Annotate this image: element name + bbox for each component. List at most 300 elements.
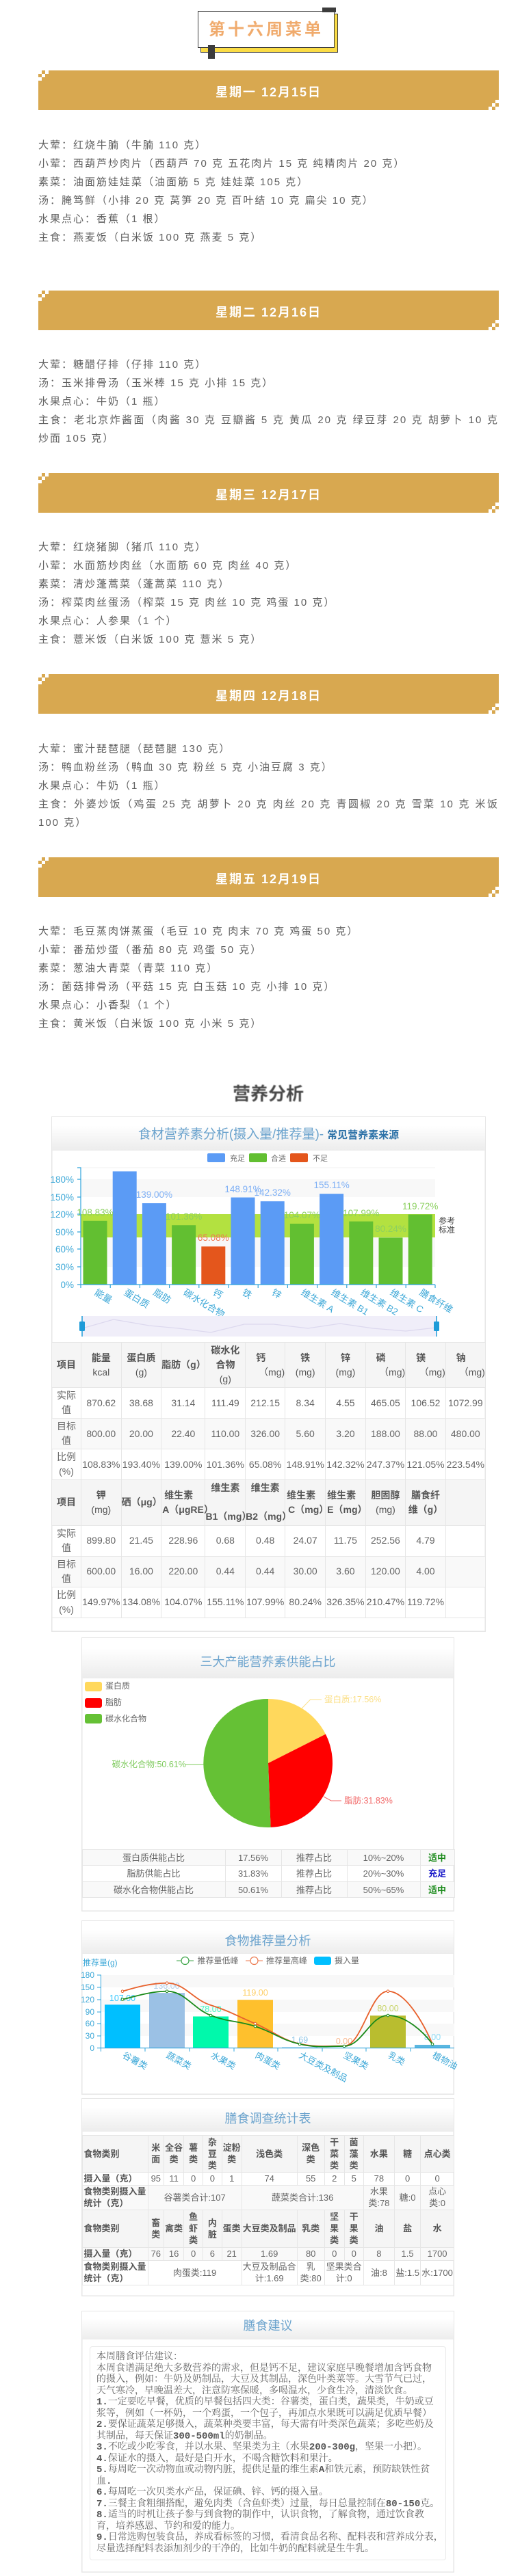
nutrient data table: 目标 (57, 1421, 76, 1432)
dietary survey table: 0 (332, 2249, 337, 2259)
x axis labels: 锌 (270, 1287, 283, 1301)
chart legend: 充足 (230, 1153, 245, 1163)
recommended high line (121, 1982, 432, 2046)
x axis labels (121, 2050, 459, 2084)
menu: Wednesday: 水果点心：人参果（1 个） (38, 615, 178, 627)
energy share table: 50.61% (238, 1884, 268, 1895)
nutrient data table: 31.14 (171, 1397, 195, 1408)
x axis labels: 维生素 C (388, 1287, 426, 1315)
panel: dietary survey table (81, 2098, 454, 2296)
bar value labels: 108.83% (77, 1207, 114, 1218)
panel: macronutrient energy share (81, 1637, 454, 1911)
dietary survey table: 摄入量（克） (83, 2249, 138, 2259)
nutrient data table: 值 (62, 1404, 71, 1415)
dietary survey table: 类:80 (300, 2273, 322, 2283)
advice text: 9.日常选购包装食品，养成看标签的习惯，看清食品名称、配料表和营养成分表， (96, 2532, 443, 2543)
dietary survey table: 果 (350, 2223, 359, 2233)
y axis labels: 180% (50, 1175, 74, 1185)
panel heading: nutrient analysis (52, 1117, 485, 1151)
dietary survey table: 点心 (428, 2186, 446, 2197)
energy share table: 50%~65% (363, 1884, 404, 1895)
dietary survey table: 点心类 (424, 2149, 451, 2159)
dietary survey table: 摄入量（克） (83, 2173, 138, 2184)
menu: Thursday: 100 克） (38, 817, 87, 829)
combo chart: food intake and recommended range (81, 1955, 459, 2084)
dietary survey table: 脏 (208, 2229, 217, 2240)
advice text: 7.三餐主食粗细搭配，避免肉类（含鱼虾类）过量，每日总量控制在80-150克。 (96, 2498, 439, 2509)
dietary survey table: 内 (208, 2218, 217, 2228)
nutrient data table: 800.00 (86, 1427, 116, 1438)
nutrient data table: 维生素 (287, 1490, 315, 1501)
nutrient data table: 870.62 (86, 1397, 116, 1408)
nutrient data table: （mg) (419, 1366, 445, 1377)
bar value labels: 148.91% (224, 1184, 261, 1194)
menu: Friday: 小荤：番茄炒蛋（番茄 80 克 鸡蛋 50 克） (38, 944, 262, 956)
nutrient data table: (%) (59, 1604, 74, 1615)
menu: Thursday (38, 743, 499, 829)
nutrient data table: 比例 (57, 1451, 76, 1462)
chart legend: 不足 (313, 1155, 328, 1163)
nutrient data table: 合物 (216, 1359, 235, 1370)
pie sectors (203, 1699, 333, 1827)
dietary survey table: 干 (350, 2212, 359, 2222)
nutrient data table: 实际 (57, 1390, 76, 1401)
nutrient data table: 24.07 (294, 1535, 317, 1546)
nutrient data table: 11.75 (334, 1535, 357, 1546)
nutrient data table: （mg) (379, 1366, 405, 1377)
menu: Monday (38, 139, 405, 243)
dietary survey table: 全谷 (165, 2143, 183, 2153)
menu: Wednesday: 素菜：清炒蓬蒿菜（蓬蒿菜 110 克） (38, 578, 230, 590)
menu: Monday: 大荤：红烧牛腩（牛腩 110 克） (38, 139, 207, 151)
reference standard label (439, 1216, 455, 1235)
nutrient data table: 142.32% (326, 1459, 365, 1470)
nutrient data table: 465.05 (371, 1397, 400, 1408)
bar value labels: 107.00 (109, 1994, 135, 2003)
menu: Friday: 主食：黄米饭（白米饭 100 克 小米 5 克） (38, 1018, 262, 1030)
nutrient data table: 实际 (57, 1528, 76, 1539)
dietary survey table: 类:0 (429, 2198, 445, 2208)
menu: Thursday: 大荤：蜜汁琵琶腿（琵琶腿 130 克） (38, 743, 231, 755)
x axis labels: 脂肪 (151, 1287, 172, 1305)
y axis labels: 90% (55, 1227, 74, 1237)
panel: food recommendation analysis (81, 1920, 454, 2095)
nutrient data table: 0.68 (216, 1535, 235, 1546)
bar value labels: 78.00 (200, 2004, 222, 2014)
dietary survey table: 类 (170, 2154, 179, 2164)
dietary survey table: 类 (227, 2154, 236, 2164)
chart legend: 推荐量高峰 (266, 1955, 307, 1965)
x axis labels: 谷薯类 (121, 2050, 149, 2071)
y axis labels: 180 (81, 1970, 94, 1980)
nutrient data table: 5.60 (296, 1427, 315, 1438)
menu: Wednesday: 主食：薏米饭（白米饭 100 克 薏米 5 克） (38, 634, 262, 645)
banner: Friday (38, 857, 499, 897)
dietary survey table: 21 (226, 2249, 237, 2259)
axes (97, 1975, 454, 2052)
menu: Tuesday: 主食：老北京炸酱面（肉酱 30 克 豆瓣酱 5 克 黄瓜 20 克 绿豆芽 20 克 胡萝卜 10 克 (38, 414, 499, 426)
advice text: 本周膳食评估建议： (96, 2352, 183, 2363)
bar value labels: 80.00 (377, 2004, 399, 2013)
dietary survey table: 盐 (403, 2223, 412, 2233)
nutrient data table: 维生素 (327, 1490, 356, 1501)
dietary survey table: 1 (229, 2173, 234, 2184)
pie legend: 碳水化合物 (105, 1713, 146, 1723)
banner: Thursday (38, 674, 499, 714)
banner: Tuesday (38, 291, 499, 330)
y axis labels: 90 (86, 2007, 94, 2017)
dietary survey table: 类 (151, 2229, 160, 2240)
panel heading: nutrient analysis: 食材营养素分析(摄入量/推荐量)- 常见营养素来源 (138, 1127, 399, 1142)
dietary survey table: 2 (332, 2173, 337, 2184)
nutrient data table: 目标 (57, 1559, 76, 1570)
nutrient data table: 1072.99 (448, 1397, 483, 1408)
heading: nutrition analysis: 营养分析 (233, 1084, 304, 1104)
dietary survey table: 鱼 (189, 2212, 198, 2222)
x axis labels: 膳食纤维 (417, 1287, 455, 1315)
panel heading: energy share (82, 1638, 454, 1678)
banner: Thursday: 星期四 12月18日 (216, 689, 322, 703)
pie legend (85, 1680, 146, 1723)
nutrient data table: 247.37% (367, 1459, 404, 1470)
y axis labels: 30% (55, 1262, 74, 1272)
advice text: 5.每周吃一次动物血或动物内脏，提供足量的维生素A和铁元素，预防缺铁性贫 (96, 2465, 430, 2476)
dietary survey table: 蛋类 (223, 2223, 241, 2233)
nutrient data table: 104.07% (164, 1596, 202, 1607)
dietary survey table: 大豆类及制品 (243, 2223, 296, 2233)
menu: Friday (38, 926, 359, 1030)
nutrient data table: 碳水化 (211, 1345, 239, 1356)
dietary survey table: 油:8 (371, 2268, 387, 2278)
x axis labels: 维生素 A (299, 1287, 336, 1315)
nutrient data table: 0.44 (216, 1566, 235, 1577)
nutrient data table: (g) (220, 1373, 231, 1384)
bar value labels: 8.00 (424, 2032, 441, 2042)
nutrient data table: 111.49 (211, 1397, 239, 1408)
energy share table: 推荐占比 (296, 1853, 332, 1862)
energy share table: 碳水化合物供能占比 (114, 1884, 194, 1895)
dietary survey table: 油 (374, 2223, 383, 2233)
bar value labels: 142.32% (255, 1188, 291, 1198)
dietary survey table: 食物类别摄入量 (83, 2186, 146, 2197)
x axis labels: 维生素 B1 (329, 1287, 370, 1317)
nutrient data table: 326.00 (250, 1427, 280, 1438)
x axis labels: 钙 (211, 1287, 224, 1301)
pie callout: fat: 脂肪:31.83% (344, 1795, 393, 1806)
nutrient data table: 119.72% (407, 1596, 444, 1607)
banner: Monday: 星期一 12月15日 (216, 85, 322, 99)
nutrient data table: 155.11% (207, 1596, 244, 1607)
dietary survey table: 大豆及制品合 (243, 2262, 296, 2272)
menu: Tuesday: 大荤：糖醋仔排（仔排 110 克） (38, 359, 207, 371)
nutrient data table: 值 (62, 1435, 71, 1446)
x axis labels (92, 1287, 455, 1319)
advice text: 8.适当的时机让孩子参与到食物的制作中，认识食物，了解食物，通过饮食教 (96, 2510, 424, 2521)
dietary survey table: 干 (330, 2137, 339, 2147)
dietary survey table: 食物类别 (83, 2223, 120, 2233)
energy share table: 推荐占比 (296, 1884, 332, 1895)
dietary survey table: 菌 (350, 2137, 359, 2147)
bar value labels: 119.72% (402, 1201, 438, 1211)
x axis labels: 大豆类及制品 (298, 2050, 350, 2084)
nutrient data table: 121.05% (406, 1459, 445, 1470)
y axis labels: 60 (86, 2019, 94, 2028)
dietary survey table: 0 (405, 2173, 410, 2184)
reference band (81, 1214, 435, 1237)
dietary survey table: 虾 (189, 2223, 198, 2233)
nutrient data table: （mg) (459, 1366, 485, 1377)
energy share table (82, 1849, 455, 1898)
dietary survey table: 类:78 (368, 2198, 389, 2208)
dietary survey table: 类 (350, 2160, 359, 2171)
pie legend: 蛋白质 (105, 1680, 130, 1691)
pie callout: protein: 蛋白质:17.56% (324, 1694, 381, 1704)
nutrient data table: 蛋白质 (127, 1352, 155, 1363)
x axis labels: 肉蛋类 (254, 2050, 282, 2071)
dietary survey table: 80 (306, 2249, 315, 2259)
menu: Wednesday (38, 541, 335, 645)
reference standard label: 参考 (439, 1216, 455, 1226)
nutrient data table: 80.24% (289, 1596, 322, 1607)
menu: Tuesday: 水果点心：牛奶（1 瓶） (38, 396, 166, 407)
menu: Tuesday: 汤：玉米排骨汤（玉米棒 15 克 小排 15 克） (38, 377, 274, 389)
nutrient data table: 223.54% (447, 1459, 484, 1470)
nutrient data table: 磷 (376, 1352, 386, 1363)
dietary survey table: 95 (151, 2173, 161, 2184)
nutrient data table: 107.99% (246, 1596, 284, 1607)
x axis labels: 能量 (92, 1287, 114, 1305)
nutrient data table: 480.00 (451, 1427, 480, 1438)
nutrient data table: 项目 (57, 1497, 76, 1507)
y axis labels: 30 (86, 2031, 94, 2041)
dietary survey table: 11 (169, 2173, 179, 2184)
energy share table: 适中 (428, 1884, 446, 1895)
bars (105, 1993, 450, 2048)
nutrient data table: 4.55 (336, 1397, 355, 1408)
dietary survey table: 8 (376, 2249, 382, 2259)
nutrient data table: 600.00 (86, 1566, 116, 1577)
dietary survey table: 糖 (403, 2149, 412, 2159)
bar value labels: 80.24% (375, 1224, 406, 1234)
panel heading: energy share: 三大产能营养素供能占比 (200, 1655, 335, 1669)
nutrient data table: 21.45 (129, 1535, 153, 1546)
panel: dietary advice (81, 2311, 454, 2573)
advice text: 血. (96, 2476, 112, 2487)
menu: Monday: 水果点心：香蕉（1 根） (38, 213, 166, 225)
dietary survey table: 禽类 (165, 2223, 183, 2233)
bar value labels (109, 1981, 441, 2046)
bars (83, 1171, 432, 1285)
nutrient data table: 139.00% (164, 1459, 202, 1470)
menu: Tuesday (38, 359, 499, 444)
dietary survey table: 食物类别摄入量 (83, 2262, 146, 2272)
chart legend (207, 1153, 328, 1163)
panel heading: food recommendation (82, 1921, 454, 1954)
dietary survey table: 米 (151, 2143, 160, 2153)
dietary survey table: 菜 (330, 2149, 339, 2159)
nutrient data table: 899.80 (86, 1535, 116, 1546)
title: week 16 menu (198, 8, 338, 59)
dietary survey table: 乳 (307, 2262, 315, 2272)
menu: Wednesday: 小荤：水面筋炒肉丝（水面筋 60 克 肉丝 40 克） (38, 560, 297, 572)
nutrient data table: 134.08% (122, 1596, 160, 1607)
advice text: 育，培养感恩、节约和爱的能力。 (96, 2521, 240, 2532)
dietary survey table: 食物类别 (83, 2149, 120, 2159)
nutrient data table (52, 1342, 485, 1618)
nutrient data table: 维生素 (251, 1482, 280, 1493)
bar value labels (77, 1180, 438, 1243)
dietary survey table: 类 (330, 2235, 339, 2245)
dietary survey table: 类 (350, 2235, 359, 2245)
nutrient data table: 膳食纤 (411, 1490, 440, 1501)
dietary survey table: 水 (433, 2223, 442, 2233)
dietary survey table: 糖:0 (400, 2192, 416, 2203)
menu: Monday: 主食：燕麦饭（白米饭 100 克 燕麦 5 克） (38, 232, 262, 243)
nutrient data table: (%) (59, 1466, 74, 1477)
nutrient data table: 铁 (300, 1352, 310, 1363)
dietary survey table: 豆 (208, 2149, 217, 2159)
y axis labels: 60% (55, 1244, 74, 1255)
menu: Tuesday: 炒面 105 克） (38, 433, 114, 444)
dietary survey table: 淀粉 (223, 2143, 241, 2153)
dietary survey table: 果 (330, 2223, 339, 2233)
chart legend: 推荐量低峰 (197, 1956, 239, 1965)
nutrient data table: 149.97% (82, 1596, 120, 1607)
dietary survey table: 计:0 (336, 2273, 352, 2283)
dietary survey table: 杂 (208, 2137, 217, 2147)
advice text: 天气寒冷，早晚温差大，注意防寒保暖，多喝温水，少食生冷，清淡饮食。 (96, 2386, 413, 2397)
dietary survey table: 16 (169, 2249, 179, 2259)
dietary survey table: 面 (151, 2154, 160, 2164)
nutrient data table: 30.00 (294, 1566, 317, 1577)
menu: Monday: 汤：腌笃鲜（小排 20 克 莴笋 20 克 百叶结 10 克 扁尖 10 克） (38, 195, 374, 206)
nutrient data table: 镁 (416, 1352, 426, 1363)
nutrient data table: C（mg） (288, 1504, 328, 1515)
dietary survey table: 5 (352, 2173, 356, 2184)
nutrient data table: （mg) (259, 1366, 285, 1377)
dietary survey table: 谷薯类合计:107 (164, 2192, 226, 2203)
pie callout: fat (324, 1795, 393, 1806)
nutrient data table: 110.00 (211, 1427, 239, 1438)
dietary survey table: 类 (330, 2160, 339, 2171)
y axis labels: 150 (81, 1983, 94, 1992)
nutrient data table: 193.40% (122, 1459, 160, 1470)
nutrient data table: 326.35% (326, 1596, 365, 1607)
dietary survey table: 0 (191, 2173, 196, 2184)
bar value labels: 65.08% (198, 1233, 229, 1243)
dietary survey table: 水果 (370, 2186, 388, 2197)
pie callout: protein (302, 1694, 381, 1708)
nutrient data table: B1（mg） (205, 1511, 251, 1522)
menu: Thursday: 主食：外婆炒饭（鸡蛋 25 克 胡萝卜 20 克 肉丝 20 克 青圆椒 20 克 雪菜 10 克 米饭 (38, 799, 499, 810)
energy share table: 20%~30% (363, 1868, 404, 1879)
dietary survey table: 蔬菜类合计:136 (272, 2192, 333, 2203)
nutrient data table: (g) (135, 1366, 147, 1377)
bar value labels: 104.07% (284, 1210, 320, 1220)
nutrient data table: 值 (62, 1573, 71, 1584)
nutrient data table: 4.00 (416, 1566, 435, 1577)
nutrient data table: 能量 (92, 1352, 111, 1363)
nutrient data table: 0.48 (256, 1535, 274, 1546)
dietary survey table: 类 (307, 2154, 315, 2164)
menu: Friday: 汤：菌菇排骨汤（平菇 15 克 白玉菇 10 克 小排 10 克） (38, 981, 335, 993)
nutrient data table: 16.00 (129, 1566, 153, 1577)
nutrient data table: 3.20 (336, 1427, 355, 1438)
advice text: 6.每周吃一次贝类水产品，保证碘、锌、钙的摄入量。 (96, 2487, 328, 2498)
nutrient data table: 3.60 (336, 1566, 355, 1577)
x axis labels: 坚果类 (342, 2050, 370, 2071)
menu: Friday: 大荤：毛豆蒸肉饼蒸蛋（毛豆 10 克 肉末 70 克 鸡蛋 50 克） (38, 926, 359, 937)
nutrient data table: 钠 (456, 1352, 466, 1363)
nutrient data table: 220.00 (168, 1566, 198, 1577)
nutrient data table: 钾 (96, 1490, 106, 1501)
dietary survey table: 藻 (350, 2149, 359, 2159)
menu: Friday: 水果点心：小香梨（1 个） (38, 999, 178, 1011)
dietary survey table: 计:1.69 (255, 2273, 284, 2283)
bar value labels: 101.36% (166, 1211, 202, 1222)
dietary survey table: 类 (189, 2235, 198, 2245)
nutrient data table: (mg) (336, 1366, 355, 1377)
x axis labels: 水果类 (209, 2050, 237, 2071)
energy share table: 充足 (428, 1868, 446, 1879)
dietary survey table: 统计（克） (83, 2198, 129, 2208)
chart legend: 合适 (271, 1153, 286, 1163)
title: week 16 menu: 第十六周菜单 (209, 21, 324, 39)
y axis labels: 0% (60, 1280, 74, 1290)
energy share table: 10%~20% (363, 1853, 404, 1862)
nutrient data table: 22.40 (171, 1427, 195, 1438)
data zoom slider (79, 1316, 439, 1337)
nutrient data table: 252.56 (371, 1535, 400, 1546)
nutrient data table: 88.00 (413, 1427, 437, 1438)
nutrient data table: (mg) (296, 1366, 315, 1377)
panel: nutrient analysis (51, 1116, 486, 1632)
dietary survey table: 78 (374, 2173, 384, 2184)
menu: Monday: 素菜：油面筋娃娃菜（油面筋 5 克 娃娃菜 105 克） (38, 176, 309, 188)
bar value labels: 119.00 (242, 1988, 268, 1998)
x axis labels: 植物油 (431, 2050, 459, 2071)
nutrient data table: 38.68 (129, 1397, 153, 1408)
nutrient data table: 维生素 (164, 1490, 193, 1501)
bar chart: nutrient intake vs recommendation (50, 1153, 455, 1337)
dietary survey table: 肉蛋类:119 (173, 2268, 216, 2278)
advice text: 4.保证水的摄入，最好是白开水，不喝含糖饮料和果汁。 (96, 2453, 338, 2464)
nutrient data table: (mg) (91, 1504, 111, 1515)
nutrient data table: 4.79 (416, 1535, 435, 1546)
pie callout: carbohydrate: 碳水化合物:50.61% (112, 1759, 186, 1769)
banner: Friday: 星期五 12月19日 (216, 872, 322, 886)
dietary survey table: 55 (306, 2173, 315, 2184)
nutrient data table: 188.00 (371, 1427, 400, 1438)
bar value labels: 1.69 (291, 2035, 308, 2045)
banner: Monday (38, 70, 499, 110)
nutrient data table: 210.47% (367, 1596, 404, 1607)
y axis title: 推荐量(g) (83, 1958, 118, 1968)
nutrient data table: 106.52 (411, 1397, 440, 1408)
banner: Tuesday: 星期二 12月16日 (216, 306, 322, 319)
x axis labels: 铁 (240, 1287, 254, 1301)
nutrient data table: 101.36% (207, 1459, 244, 1470)
y axis labels: 0 (90, 2043, 94, 2053)
advice text: 的摄入，例如：牛奶及奶制品，大豆及其制品，深色叶类菜等。大雪节气已过， (96, 2374, 432, 2385)
chart legend (177, 1955, 359, 1965)
dietary survey table: 畜 (151, 2218, 160, 2228)
dietary survey table: 统计（克） (83, 2273, 129, 2283)
x axis labels: 蛋白质 (122, 1287, 151, 1310)
nutrient data table: E（mg） (327, 1504, 367, 1515)
bar value labels: 0.00 (336, 2037, 352, 2046)
nutrient data table: 比例 (57, 1589, 76, 1600)
